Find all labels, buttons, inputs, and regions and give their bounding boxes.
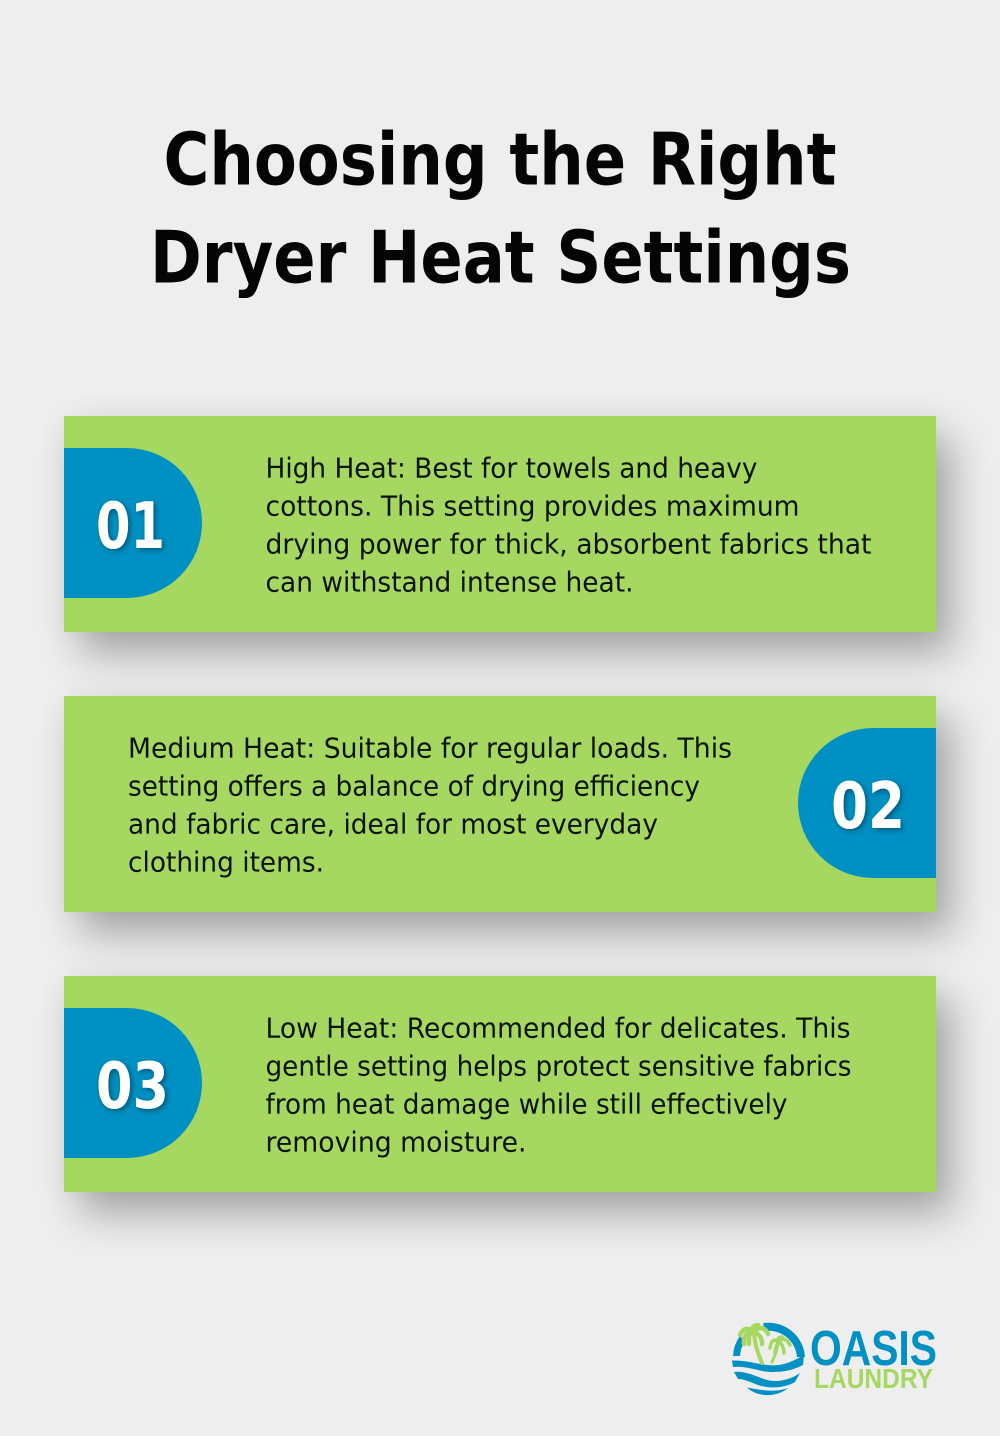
icon: waves [732, 1355, 804, 1395]
text: medium heat description: clothing items. [128, 846, 324, 878]
text: OASIS: OASIS [810, 1322, 937, 1376]
text: low heat description: from heat damage while still effectively [266, 1088, 788, 1120]
text: low heat description: gentle setting helps protect sensitive fabrics [266, 1050, 852, 1082]
text: high heat description: drying power for thick, absorbent fabrics that [266, 528, 872, 560]
text: medium heat description: setting offers a balance of drying efficiency [128, 770, 700, 802]
text: low heat description: Low Heat: Recommended for delicates. This [266, 1012, 850, 1044]
text: high heat description: cottons. This setting provides maximum [266, 490, 800, 522]
text: high heat description: can withstand intense heat. [266, 566, 634, 598]
panel: medium heat [64, 696, 936, 912]
text: LAUNDRY: LAUNDRY [814, 1363, 933, 1394]
text: medium heat description: and fabric care, ideal for most everyday [128, 808, 658, 840]
panel: high heat [64, 416, 936, 632]
title: Choosing the Right [164, 118, 836, 202]
logo: Oasis Laundry [732, 1322, 937, 1396]
badge: 01: 01 [96, 490, 165, 564]
icon: palm trees [740, 1325, 790, 1363]
text: high heat description: High Heat: Best for towels and heavy [266, 452, 758, 484]
panel: low heat [64, 976, 936, 1192]
text: high heat description [266, 452, 872, 598]
text: low heat description: removing moisture. [266, 1126, 526, 1158]
icon: sun arc [733, 1323, 805, 1357]
text: medium heat description: Medium Heat: Suitable for regular loads. This [128, 732, 732, 764]
title: Dryer Heat Settings [150, 216, 851, 300]
badge: 01 [64, 448, 202, 598]
badge: 02 [798, 728, 936, 878]
text: medium heat description [128, 732, 732, 878]
badge: 03: 03 [96, 1050, 169, 1124]
text: low heat description [266, 1012, 852, 1158]
badge: 03 [64, 1008, 202, 1158]
badge: 02: 02 [831, 770, 905, 844]
title [150, 118, 851, 300]
